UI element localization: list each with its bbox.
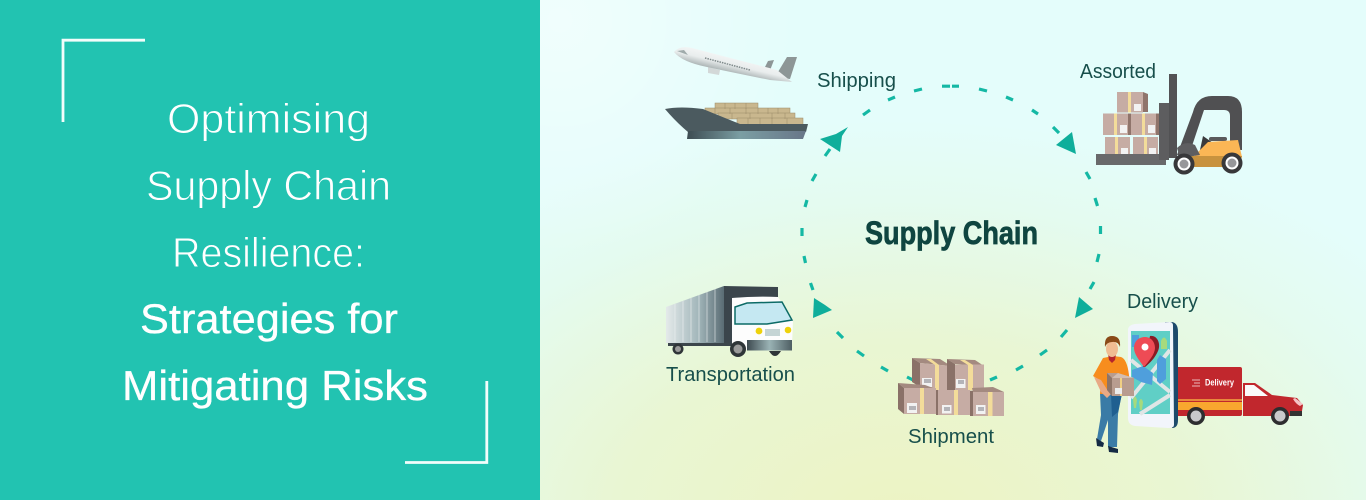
title — [122, 95, 428, 409]
corner bracket: bottom right — [405, 381, 487, 462]
panel: title panel — [0, 0, 540, 500]
back box right — [947, 359, 984, 390]
title: Mitigating Risks — [122, 362, 428, 409]
icon: truck — [666, 286, 793, 357]
van text: Delivery — [1205, 378, 1234, 388]
icon: delivery van — [1176, 367, 1303, 425]
icon: airplane — [674, 47, 797, 82]
back box left — [912, 358, 951, 390]
front box left — [898, 383, 936, 414]
arrow: to delivery — [1075, 297, 1093, 318]
front box middle — [936, 390, 970, 415]
map pin — [1134, 336, 1159, 367]
center heading: Supply Chain: Supply Chain — [865, 215, 1038, 251]
label: Delivery: Delivery — [1127, 291, 1198, 313]
background: right area — [540, 0, 1366, 500]
icon: smartphone with map — [1128, 322, 1178, 428]
title: Resilience: — [172, 229, 365, 276]
title: Optimising — [167, 95, 370, 142]
label: Assorted: Assorted — [1080, 61, 1156, 83]
icon: stacked boxes — [898, 358, 1004, 416]
icon: delivery person — [1093, 336, 1134, 453]
front box right — [970, 387, 1004, 416]
cycle: dashed circle with arrows — [802, 86, 1100, 380]
label: Transportation: Transportation — [666, 364, 795, 386]
boxes on forklift — [1103, 92, 1159, 157]
arrow: to assorted — [1056, 132, 1076, 154]
corner bracket: top left — [63, 40, 145, 122]
parcel — [1107, 373, 1134, 396]
arrow: to shipping — [820, 127, 848, 152]
title: Supply Chain — [146, 162, 391, 209]
label: Shipment: Shipment — [908, 426, 994, 448]
label: Shipping: Shipping — [817, 70, 896, 92]
icon: cargo ship — [665, 103, 808, 139]
arrow: to transportation — [813, 298, 832, 318]
title: Strategies for — [140, 295, 398, 342]
icon: forklift with boxes — [1096, 74, 1242, 174]
